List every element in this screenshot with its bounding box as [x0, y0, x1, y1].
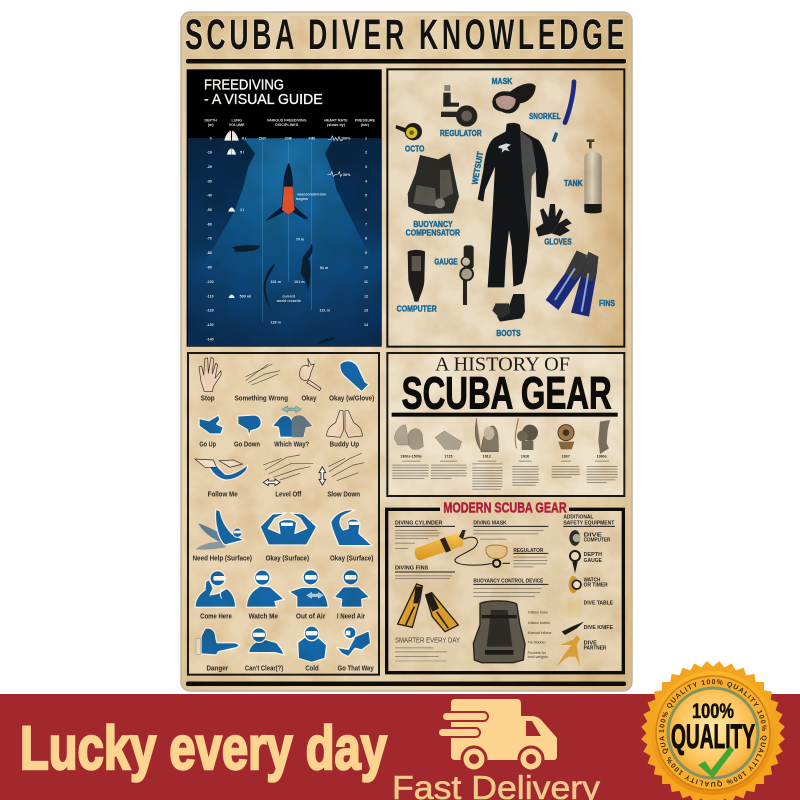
section headings	[395, 514, 615, 644]
column headers	[204, 119, 376, 127]
safety equipment items: DEPTH	[584, 552, 602, 558]
discipline and value labels: 128 m	[270, 320, 282, 324]
discipline and value labels: 5 l	[240, 151, 244, 155]
timeline dates: 1960s	[597, 454, 607, 458]
section headings: REGULATOR	[513, 548, 543, 554]
wetsuit	[478, 123, 548, 287]
modern gear title: MODERN SCUBA GEAR	[443, 500, 567, 517]
hand signal labels: Okay (Surface)	[330, 554, 374, 563]
equipment labels: COMPUTER	[397, 304, 437, 314]
section headings: SAFETY EQUIPMENT	[563, 520, 615, 526]
quality badge: 100% QUALITY 100% QUALITY 100% QUALITY 100% QUALITY 100% QUALITY	[659, 679, 767, 787]
hand signal labels: Need Help (Surface)	[193, 554, 252, 563]
depth scale: -10	[207, 151, 212, 155]
heading: - A VISUAL GUIDE	[204, 92, 323, 108]
hand signal icons: row 6	[196, 626, 371, 662]
equipment labels: GAUGE	[434, 256, 458, 266]
timeline dates: 1715	[444, 454, 452, 458]
column headers: (slows by)	[327, 123, 346, 127]
modern gear body copy	[395, 530, 547, 661]
shark silhouettes and other divers	[232, 243, 336, 344]
safety equipment items: PARTNER	[584, 645, 606, 651]
icon: diving cylinder and hose	[415, 530, 510, 567]
safety equipment items: WATCH	[584, 578, 600, 584]
equipment labels: GLOVES	[544, 236, 572, 246]
discipline and value labels: vasoconstriction	[297, 192, 326, 196]
timeline dates: 1937	[562, 454, 570, 458]
discipline and value labels	[240, 136, 351, 324]
column headers: PRESSURE	[355, 119, 376, 123]
pressure scale: 2	[365, 151, 367, 155]
discipline and value labels: 50%	[343, 173, 351, 177]
equipment labels	[397, 76, 615, 338]
equipment labels: BOOTS	[496, 328, 521, 338]
panel: diving equipment	[387, 69, 624, 347]
panel: hand signals	[188, 353, 379, 675]
icon: mask	[492, 83, 536, 113]
column headers: (bar)	[361, 123, 370, 127]
discipline and value labels: 121 m	[319, 309, 331, 313]
pressure scale: 12	[364, 294, 368, 298]
diver: descending red figure	[265, 163, 308, 221]
hand signal labels: Stop	[201, 394, 215, 403]
discipline and value labels: CNT	[259, 137, 267, 141]
hand signal labels: Go Up	[199, 440, 216, 449]
buoyancy device callouts: Tie bladder	[528, 640, 547, 644]
equipment labels: TANK	[564, 178, 583, 188]
hand signal labels: Watch Me	[249, 612, 278, 621]
pressure scale: 6	[365, 208, 367, 212]
equipment labels: FINS	[599, 298, 615, 308]
discipline lines	[262, 142, 312, 322]
icon: lungs	[224, 131, 239, 298]
hand signal labels: Come Here	[200, 612, 232, 621]
safety equipment items: DIVE	[584, 640, 597, 646]
buoyancy device callouts: Inflator hose	[528, 610, 548, 614]
equipment labels: SNORKEL	[529, 111, 561, 121]
icon: heart rate traces	[327, 136, 343, 176]
history heading	[392, 354, 618, 419]
buoyancy device callouts: Pockets for	[528, 651, 547, 655]
depth scale: -60	[207, 222, 212, 226]
depth scale	[206, 136, 214, 341]
hand signal icons: row 1	[199, 357, 369, 392]
discipline and value labels: FIM	[309, 137, 315, 141]
panel: modern scuba gear	[387, 500, 623, 673]
equipment labels: WETSUIT	[469, 151, 485, 185]
column headers: VARIOUS FREEDIVING	[267, 119, 307, 123]
hand signal labels: Go That Way	[338, 664, 374, 673]
depth scale: 0	[210, 136, 212, 140]
section headings: DIVING MASK	[473, 520, 507, 526]
icon: tank	[584, 139, 602, 213]
discipline and value labels: 101 m	[270, 280, 282, 284]
hand signal labels: Slow Down	[327, 489, 360, 498]
discipline and value labels: 101 m	[294, 280, 305, 284]
pressure scale: 11	[364, 280, 368, 284]
depth scale: -70	[207, 237, 212, 241]
column headers: VOLUME	[229, 123, 245, 127]
hand signal labels: Okay	[301, 394, 317, 403]
hand signal labels: Level Off	[275, 489, 302, 498]
timeline icons	[394, 418, 610, 454]
depth scale: -130	[206, 323, 214, 327]
discipline and value labels: CNF	[285, 137, 293, 141]
section headings: BUOYANCY CONTROL DEVICE	[473, 578, 544, 584]
hand signal labels: Follow Me	[208, 489, 238, 498]
buoyancy device callouts: Manual inflator	[528, 631, 552, 635]
history heading: A HISTORY OF	[435, 354, 570, 376]
depth scale: -90	[207, 265, 212, 269]
heading: FREEDIVING	[204, 77, 284, 93]
pressure scale: 10	[364, 265, 368, 269]
depth scale: -20	[207, 165, 212, 169]
depth scale: -100	[206, 280, 214, 284]
depth scale: -30	[207, 179, 212, 183]
pressure scale: 4	[365, 179, 368, 183]
equipment labels: MASK	[492, 76, 512, 86]
pressure scale: 9	[365, 251, 367, 255]
icon: buoyancy compensator	[408, 153, 459, 214]
icon: delivery truck	[438, 699, 557, 771]
rock walls	[188, 138, 381, 283]
hand signal labels: Danger	[206, 664, 228, 673]
panel: a history of scuba gear	[387, 353, 624, 496]
safety equipment items: OR TIMER	[584, 583, 608, 589]
quality badge: 100%	[692, 700, 734, 723]
timeline dates: 1918	[521, 454, 529, 458]
section headings: SMARTER EVERY DAY	[395, 637, 460, 644]
column headers: HEART RATE	[324, 119, 348, 123]
history heading: SCUBA GEAR	[402, 368, 612, 419]
icon: diving fins	[398, 584, 458, 632]
column headers: DISCIPLINES	[275, 123, 299, 127]
pressure scale: 8	[365, 237, 367, 241]
equipment labels: COMPENSATOR	[406, 228, 460, 238]
discipline and value labels: world records	[276, 299, 301, 303]
depth scale: -50	[207, 208, 212, 212]
hand signal labels: Go Down	[234, 440, 260, 449]
pressure scale: 7	[365, 222, 367, 226]
icon: diving mask	[486, 545, 507, 558]
section headings: DIVING FINS	[395, 565, 429, 571]
buoyancy device callouts	[528, 610, 552, 659]
discipline and value labels: 100%	[341, 136, 351, 140]
hand signal icons: row 2	[199, 406, 362, 437]
depth scale: -120	[206, 309, 214, 313]
hand signal labels: Cold	[305, 664, 319, 673]
safety equipment items: GAUGE	[584, 558, 602, 564]
hand signal labels: Okay (w/Glove)	[329, 394, 375, 403]
icon: gauge console	[460, 245, 474, 305]
hand signal labels: Something Wrong	[235, 394, 288, 403]
safety equipment items: DIVE KNIFE	[584, 625, 613, 631]
hand signal labels: I Need Air	[337, 612, 365, 621]
timeline dates: 1913	[483, 454, 491, 458]
discipline and value labels: 500 ml	[240, 294, 251, 298]
discipline and value labels: current	[282, 294, 296, 298]
hand signal labels: Out of Air	[296, 612, 325, 621]
section headings: ADDITIONAL	[563, 514, 594, 520]
discipline and value labels: 6 l	[242, 136, 246, 140]
buoyancy device callouts: Inflator button	[528, 621, 550, 625]
hand signal icons: row 4	[196, 509, 372, 550]
discipline and value labels: 91 m	[320, 266, 329, 270]
depth scale: -140	[206, 337, 214, 341]
safety equipment items: DIVE TABLE	[584, 601, 613, 607]
icon: regulator	[441, 85, 477, 127]
discipline and value labels: 70 m	[296, 238, 305, 242]
depth scale: -40	[207, 194, 212, 198]
column headers: DEPTH	[204, 119, 217, 123]
column headers: LUNG	[231, 119, 242, 123]
banner: red footer strip	[0, 694, 800, 800]
equipment labels: REGULATOR	[440, 128, 482, 138]
timeline body copy	[392, 461, 617, 490]
column headers: (m)	[208, 123, 214, 127]
pressure scale: 13	[364, 309, 368, 313]
discipline and value labels: 1 l	[240, 208, 244, 212]
safety equipment items: COMPUTER	[584, 537, 610, 543]
pressure scale: 5	[365, 194, 367, 198]
icon: boots	[492, 294, 525, 322]
hand signal labels: Can't Clear(?)	[245, 664, 284, 673]
hand signal icons: row 3	[195, 453, 364, 486]
hand signal icons: row 5	[195, 570, 370, 607]
heading	[204, 77, 323, 108]
pressure scale: 1	[365, 136, 367, 140]
poster	[181, 11, 632, 691]
icon: buoyancy control device	[473, 601, 525, 663]
depth scale: -80	[207, 251, 212, 255]
hand signal labels: Okay (Surface)	[266, 554, 309, 563]
equipment labels: BUOYANCY	[413, 219, 453, 229]
icon: octo	[396, 123, 422, 140]
safety equipment items: DIVE	[584, 532, 603, 538]
icon: snorkel	[553, 82, 574, 142]
icon: dive computer	[408, 250, 425, 302]
discipline and value labels: begins	[296, 197, 308, 201]
hand signal labels	[193, 394, 375, 673]
pressure scale: 3	[365, 165, 367, 169]
icon: gloves	[536, 204, 572, 237]
equipment labels: OCTO	[405, 144, 425, 154]
icon: fins	[546, 251, 598, 317]
panel frame	[387, 509, 623, 673]
hand signal labels: Buddy Up	[330, 440, 359, 449]
pressure scale	[364, 136, 369, 327]
hand signal labels: Which Way?	[274, 440, 309, 449]
section headings: DIVING CYLINDER	[395, 520, 442, 526]
timeline dates: 1300s-1500s	[400, 454, 422, 458]
buoyancy device callouts: lead weights	[528, 655, 548, 659]
pressure scale: 14	[364, 323, 369, 327]
panel: freediving visual guide	[187, 69, 382, 347]
banner slogan: Lucky every day	[20, 714, 387, 782]
timeline dates	[400, 454, 607, 458]
safety equipment items	[557, 530, 613, 667]
depth scale: -110	[206, 294, 214, 298]
